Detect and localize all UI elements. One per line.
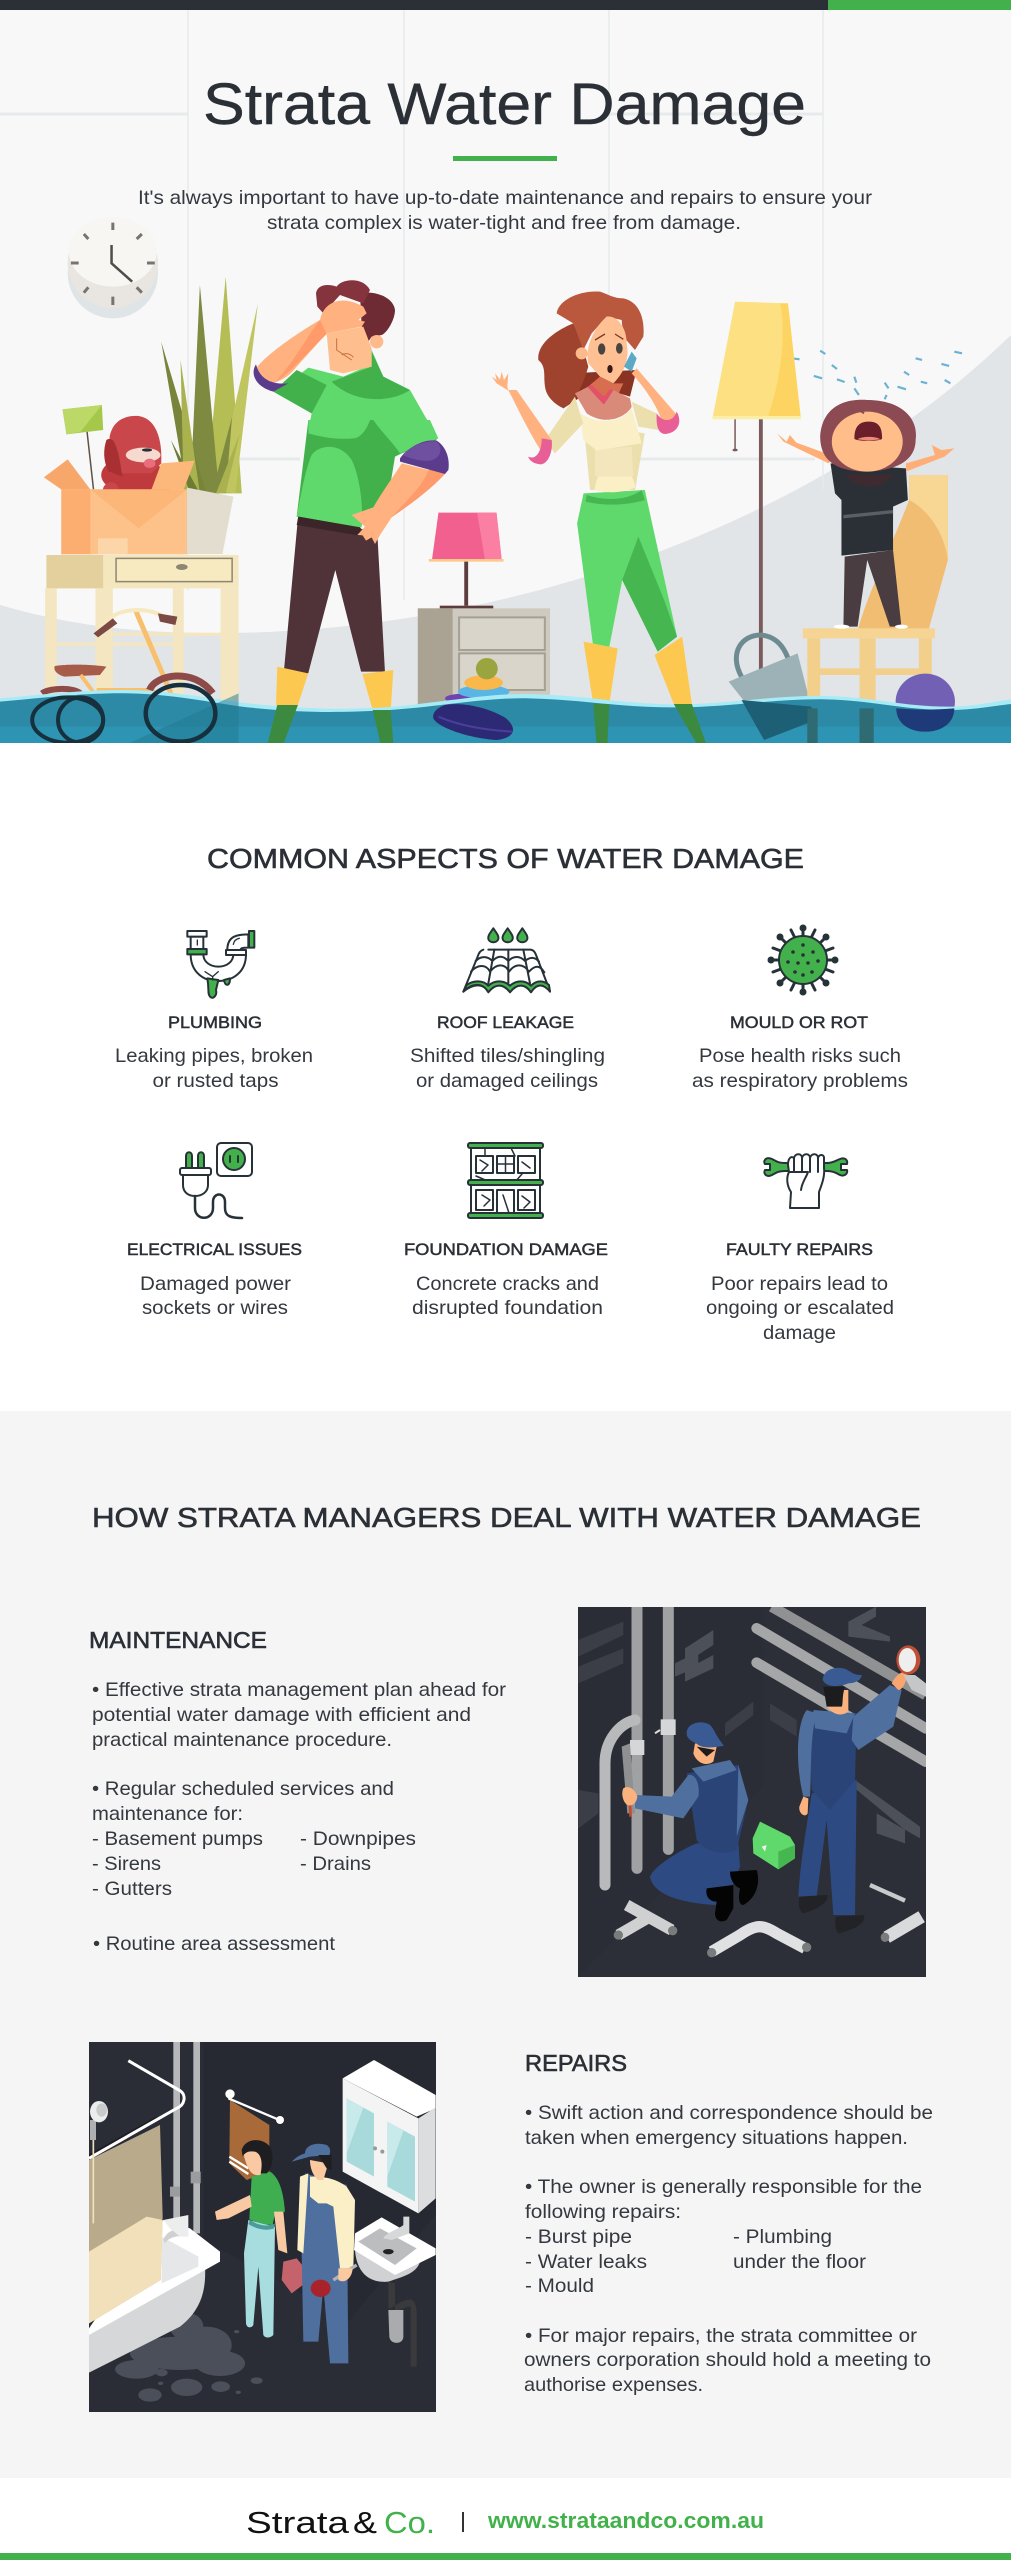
description: [410, 1045, 605, 1092]
description: [115, 1045, 313, 1092]
icon: mould spore: [768, 924, 838, 996]
hero illustration: [0, 10, 1011, 743]
maintenance text: - Downpipes: [300, 1828, 416, 1850]
small table lamp: [429, 513, 504, 609]
intro text: [138, 187, 873, 234]
repairs text: following repairs:: [525, 2201, 681, 2223]
icon: cracked building: [468, 1143, 543, 1218]
description: or damaged ceilings: [416, 1070, 598, 1092]
maintenance text: • Effective strata management plan ahead for: [92, 1679, 507, 1701]
repairs heading: REPAIRS: [525, 2050, 627, 2076]
maintenance text: • Regular scheduled services and: [92, 1778, 394, 1800]
repairs text: - Plumbing: [733, 2226, 832, 2248]
description: damage: [763, 1322, 836, 1344]
repairs text: - Burst pipe: [525, 2226, 632, 2248]
repairs text: • For major repairs, the strata committee or: [525, 2325, 918, 2347]
panel: how strata managers deal: [0, 1411, 1011, 2478]
label: FOUNDATION DAMAGE: [404, 1240, 608, 1259]
description: ongoing or escalated: [706, 1297, 894, 1319]
sink: [354, 2217, 436, 2367]
person: woman lower body: [577, 423, 692, 704]
icon: hand with wrench: [764, 1154, 847, 1208]
cabinet: [343, 2060, 436, 2213]
label: ELECTRICAL ISSUES: [127, 1240, 302, 1259]
footer logo: Strata: [246, 2505, 350, 2540]
description: [706, 1273, 894, 1344]
description: Concrete cracks and: [416, 1273, 599, 1295]
handbag: [728, 632, 808, 700]
description: as respiratory problems: [692, 1070, 908, 1092]
repairs text: [524, 2102, 933, 2396]
tricycle: [42, 610, 213, 697]
sign on stick: [63, 405, 103, 489]
description: Shifted tiles/shingling: [410, 1045, 605, 1067]
floor lamp: [732, 417, 763, 670]
maintenance heading: MAINTENANCE: [89, 1627, 267, 1653]
cardboard box: [44, 459, 195, 554]
maintenance text: - Gutters: [92, 1878, 172, 1900]
label: FAULTY REPAIRS: [726, 1240, 873, 1259]
repairs text: taken when emergency situations happen.: [525, 2127, 908, 2149]
panel: foundation damage: [404, 1143, 608, 1319]
icon: wall clock: [68, 217, 158, 318]
repairs text: under the floor: [733, 2251, 867, 2273]
maintenance text: - Sirens: [92, 1853, 161, 1875]
towel rail and towel: [225, 2089, 284, 2180]
kneeling plumber: [622, 1722, 758, 1921]
stacking ring toy: [445, 658, 509, 703]
repairs text: - Mould: [525, 2275, 594, 2297]
illustration: plumbers at work: [578, 1607, 926, 1977]
ball: [896, 674, 955, 707]
repairs text: owners corporation should hold a meeting to: [524, 2349, 931, 2371]
description: sockets or wires: [142, 1297, 288, 1319]
bathtub: [89, 2215, 220, 2373]
illustration: bathroom repair: [89, 2042, 437, 2412]
label: ROOF LEAKAGE: [437, 1013, 574, 1032]
shower curtain: [89, 2061, 184, 2323]
intro text: strata complex is water-tight and free from damage.: [267, 212, 741, 234]
water puddle: [115, 2313, 263, 2402]
heading: HOW STRATA MANAGERS DEAL WITH WATER DAMAGE: [92, 1502, 921, 1533]
maintenance text: - Basement pumps: [92, 1828, 263, 1850]
tears: [794, 350, 962, 400]
footer url: www.strataandco.com.au: [487, 2508, 764, 2533]
person: crying child: [777, 400, 954, 629]
maintenance text: practical maintenance procedure.: [92, 1729, 392, 1751]
maintenance text: • Routine area assessment: [93, 1933, 336, 1955]
person: man upper body: [254, 280, 430, 425]
woman: [215, 2140, 287, 2337]
repairs text: - Water leaks: [525, 2251, 647, 2273]
maintenance text: potential water damage with efficient and: [92, 1704, 471, 1726]
intro text: It's always important to have up-to-date maintenance and repairs to ensure your: [138, 187, 873, 209]
section heading: common aspects: COMMON ASPECTS OF WATER DAMAGE: [207, 843, 804, 874]
footer logo: Co.: [384, 2505, 435, 2540]
person: woman upper body: [492, 291, 679, 477]
footer divider: [462, 2512, 464, 2532]
maintenance text: [92, 1679, 507, 1955]
person: man legs: [276, 518, 393, 710]
description: disrupted foundation: [412, 1297, 603, 1319]
side table: [45, 555, 239, 700]
toolbag: [282, 2258, 305, 2293]
label: PLUMBING: [168, 1013, 262, 1032]
person: man torso and arm: [296, 420, 449, 544]
flood water: [0, 690, 1011, 743]
repairs text: authorise expenses.: [524, 2374, 703, 2396]
repairs text: • The owner is generally responsible for the: [525, 2176, 922, 2198]
footer logo: &: [353, 2505, 377, 2540]
description: Poor repairs lead to: [711, 1273, 888, 1295]
plant: [161, 277, 258, 493]
repairs text: • Swift action and correspondence should be: [525, 2102, 933, 2124]
description: Damaged power: [140, 1273, 292, 1295]
maintenance text: maintenance for:: [92, 1803, 243, 1825]
floor lamp shade: [713, 302, 801, 419]
panel: roof leakage: [410, 928, 605, 1092]
label: MOULD OR ROT: [730, 1013, 868, 1032]
bottom bar: [0, 2553, 1011, 2560]
maintenance text: - Drains: [300, 1853, 371, 1875]
panel: electrical issues: [127, 1143, 302, 1319]
description: Leaking pipes, broken: [115, 1045, 313, 1067]
nightstand: [418, 608, 550, 704]
description: Pose health risks such: [699, 1045, 901, 1067]
panel: mould or rot: [692, 924, 908, 1092]
description: or rusted taps: [152, 1070, 279, 1092]
title underline: [453, 156, 557, 161]
description: [692, 1045, 908, 1092]
description: [412, 1273, 603, 1319]
toolbox: [753, 1822, 795, 1869]
chair: [803, 475, 948, 700]
icon: leaking pipe: [187, 931, 254, 998]
icon: plug and socket: [180, 1143, 252, 1218]
panel: plumbing: [115, 931, 313, 1092]
plant pot: [186, 488, 234, 554]
dog toy: [101, 416, 170, 490]
panel: faulty repairs: [706, 1154, 894, 1344]
description: [140, 1273, 292, 1319]
footer logo: [246, 2505, 435, 2540]
top bar: [0, 0, 1011, 10]
submerged objects: [32, 685, 954, 743]
standing plumber: [798, 1645, 926, 1933]
icon: leaking roof: [463, 928, 550, 992]
title: Strata Water Damage: [203, 72, 806, 137]
loose pipes and spanner: [614, 1885, 922, 1957]
plumber with plunger: [292, 2144, 357, 2363]
